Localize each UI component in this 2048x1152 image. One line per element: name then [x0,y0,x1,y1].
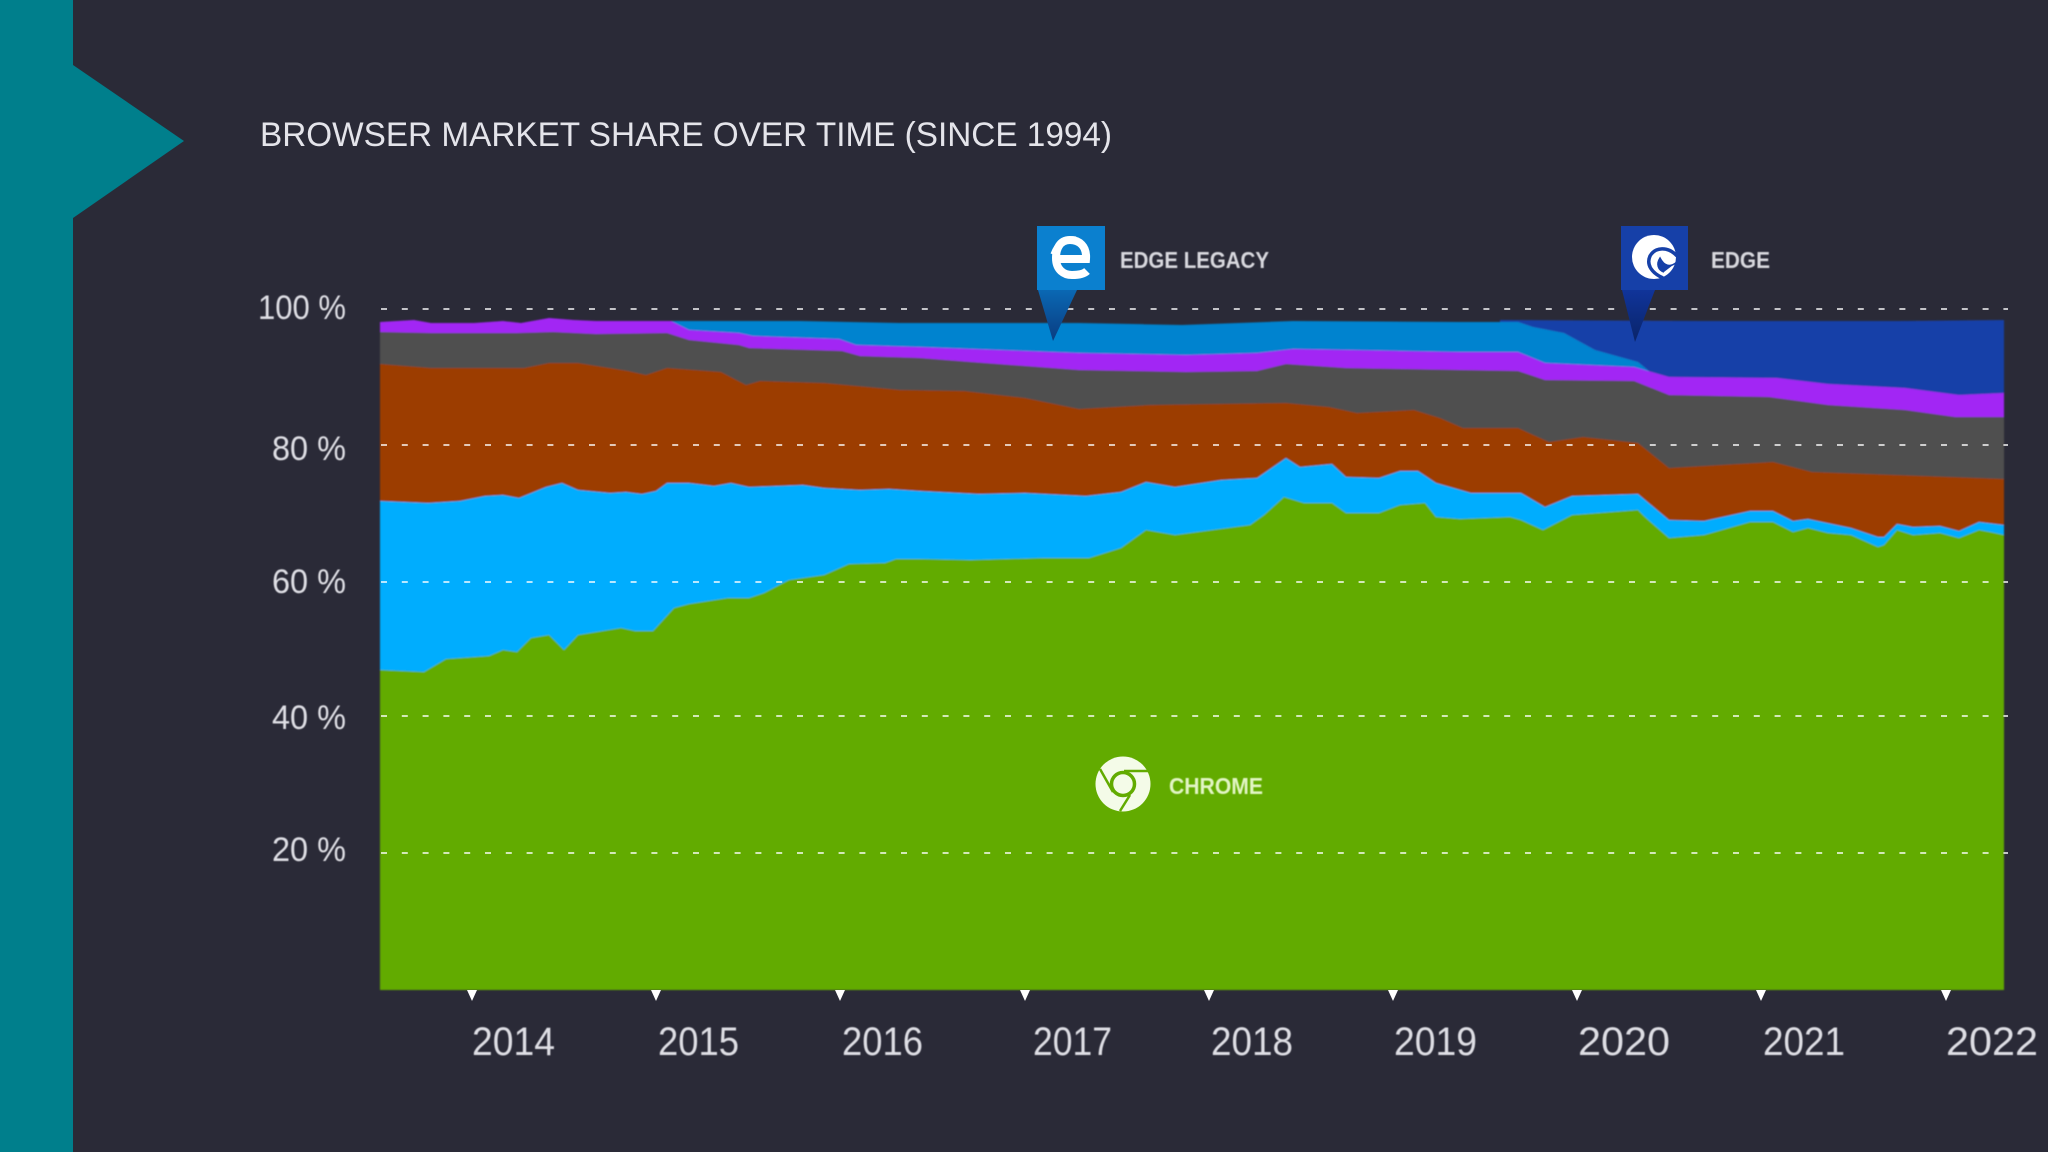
area: Opera [380,318,2004,990]
icon: Chrome [1096,756,1150,812]
x-axis year labels: 2022 [1946,1020,2038,1064]
y-axis labels: 40 % [272,699,346,737]
x-axis year labels: 2014 [472,1020,555,1064]
label: Edge: EDGE [1711,247,1770,273]
label: Chrome: CHROME [1169,773,1263,799]
icon: Edge Legacy pin [1037,226,1105,341]
area: Edge [1500,320,2004,990]
x-axis ticks [467,990,1951,1001]
x-axis year labels: 2019 [1394,1020,1477,1064]
teal side bar with arrow [0,0,184,1152]
x-axis year labels: 2020 [1578,1020,1670,1064]
x-axis year labels: 2017 [1033,1020,1112,1064]
area: Safari-other gray [380,332,2004,990]
stacked area chart [380,318,2004,990]
x-axis year labels: 2016 [842,1020,923,1064]
y-axis labels: 100 % [258,289,346,327]
y-axis labels: 20 % [272,831,346,869]
area: Edge Legacy [671,321,1660,990]
dashed grid lines [381,309,2008,853]
icon: Edge pin [1621,226,1688,342]
area: Internet Explorer [380,458,2004,990]
x-axis year labels: 2015 [658,1020,739,1064]
y-axis labels [258,289,346,869]
label: Edge Legacy: EDGE LEGACY [1120,247,1269,273]
y-axis labels: 60 % [272,563,346,601]
y-axis labels: 80 % [272,430,346,468]
x-axis year labels: 2021 [1763,1020,1845,1064]
x-axis year labels: 2018 [1211,1020,1293,1064]
x-axis year labels [472,1020,2038,1064]
title: BROWSER MARKET SHARE OVER TIME (SINCE 1994) [260,116,1112,154]
area: Chrome [380,497,2004,990]
area: Firefox [380,363,2004,990]
